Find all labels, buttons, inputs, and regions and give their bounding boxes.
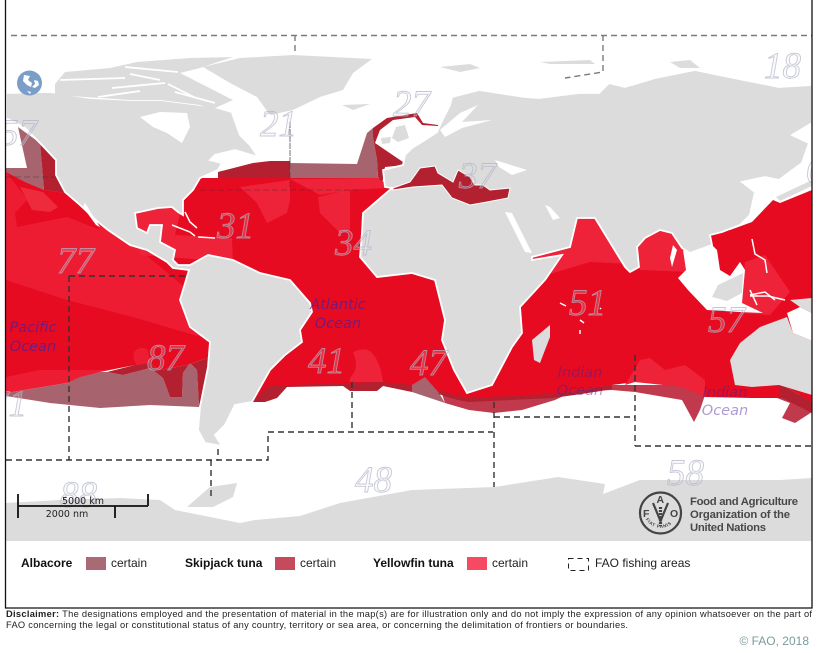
disclaimer text: FAO concerning the legal or constitutional status of any country, territory or sea area, or concerning the delimitation of frontiers or boundaries. [6,620,628,630]
area number labels: 27 [393,84,432,125]
ocean labels: Indian [558,365,602,381]
species range: yellowfin Pacific [6,172,215,408]
lighter red patches [130,178,790,397]
Mediterranean Sea range [393,166,510,205]
legend item: skipjack tuna: Skipjack tuna [185,556,263,570]
land: Americas [6,92,312,446]
FAO fishing area boundaries [6,35,812,497]
area number labels: 57 [0,113,38,154]
area number labels: 58 [667,453,704,494]
logo: FAO emblem [638,491,682,535]
ocean labels: Pacific [10,320,57,336]
land: Eurasia and Africa [360,70,812,393]
species range: yellowfin Atlantic and Indo-Pacific [130,178,812,402]
legend item: albacore: Albacore [21,556,73,570]
species range: overlap dark zones [40,113,812,413]
ocean labels: Ocean [10,339,56,355]
ocean labels: Ocean [702,403,748,419]
area number labels: 31 [216,206,254,247]
logo: FAO emblem: A [656,494,664,506]
dark line between ranges in the Indian Ocean [439,387,612,400]
area number labels: 37 [458,156,498,197]
ocean labels: Ocean [557,383,603,399]
legend item: albacore: certain [111,556,147,570]
area number labels: 87 [147,338,186,379]
map panel [6,34,812,541]
area number labels: 47 [410,343,448,384]
logo: FAO wordmark [690,497,798,531]
area number labels: 88 [60,475,98,516]
area number labels: 57 [708,300,746,341]
area number labels: 34 [334,223,372,264]
legend item: skipjack tuna [185,556,336,570]
legend item: yellowfin tuna [373,556,528,570]
scale bar [18,494,148,520]
Indonesia and Philippines island specks [172,212,785,334]
seas and inland water [83,105,812,340]
legend [21,556,690,570]
ocean labels: Atlantic [309,297,366,313]
logo: FAO emblem: O [670,508,678,520]
logo: FAO wordmark: Food and Agriculture [690,496,798,508]
legend item: albacore [21,556,147,570]
legend item: yellowfin tuna: Yellowfin tuna [373,556,454,570]
land: Southeast Asia islands [712,180,812,313]
area number labels: 21 [260,104,297,145]
species range: albacore [6,127,445,403]
ocean labels [10,297,748,419]
logo: FAO emblem: FIAT PANIS [646,518,671,528]
land: Arctic islands and Greenland [55,55,372,117]
icon: globe [17,70,42,96]
logo: FAO wordmark: United Nations [690,522,766,534]
scale bar: 5000 km [62,496,104,507]
disclaimer text: Disclaimer: The designations employed and the presentation of material in the map(s) are for illustration only and do not imply the expression of any opinion whatsoever on the part of [6,609,812,619]
legend item: yellowfin tuna: certain [492,556,528,570]
ocean labels: Indian [703,385,747,401]
copyright: © FAO, 2018 [739,634,809,648]
scale bar: 2000 nm [46,509,88,520]
area number labels: 51 [569,283,606,324]
area number labels [0,46,823,516]
legend item: skipjack tuna: certain [300,556,336,570]
Antarctica [6,477,812,541]
disclaimer text [6,609,812,630]
logo: FAO emblem: F [643,508,650,520]
area number labels: 48 [355,460,392,501]
area number labels: 41 [308,341,345,382]
area number labels: 18 [764,46,802,87]
land: islands [381,60,812,395]
legend item: FAO fishing areas: FAO fishing areas [595,556,690,570]
logo: FAO wordmark: Organization of the [690,509,790,521]
ocean labels: Ocean [315,316,361,332]
species range: skipjack band [439,385,812,423]
area number labels: 77 [57,241,96,282]
